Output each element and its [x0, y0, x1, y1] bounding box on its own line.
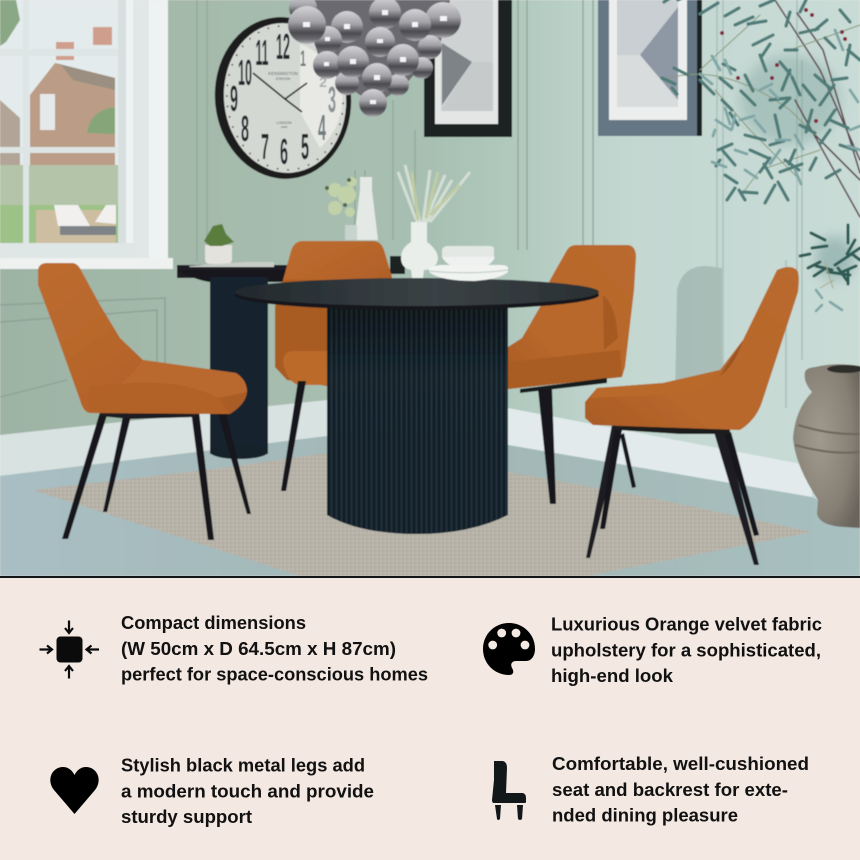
wall clock: 10: [238, 52, 252, 93]
wall clock: [207, 10, 359, 186]
chrome bubble chandelier: [288, 0, 461, 117]
pot plant on console: [189, 224, 274, 267]
icon: compact arrows: [40, 620, 99, 678]
baseboard: [0, 400, 812, 498]
rug: [33, 453, 812, 576]
wall clock: 8: [241, 108, 249, 149]
stone urn: [793, 364, 860, 528]
wall clock: KENSINGTON: [268, 71, 298, 76]
icon: chair: [492, 761, 526, 820]
text: comfortable seat: Comfortable, well-cushioned: [552, 754, 809, 774]
framed print right: [598, 0, 702, 136]
orange chair front left: [38, 263, 251, 540]
wall clock: 4: [318, 107, 326, 148]
wall clock: 1846: [281, 125, 288, 129]
floor: [0, 436, 860, 576]
text: compact dimensions: Compact dimensions: [121, 613, 306, 633]
text: comfortable seat: seat and backrest for exte-: [552, 780, 788, 800]
photo bottom divider: [0, 576, 860, 578]
text: black metal legs: Stylish black metal legs add: [121, 756, 365, 776]
feature: compact dimensions: [40, 613, 428, 684]
text: orange velvet: [551, 614, 822, 686]
icon: palette: [483, 623, 535, 675]
text: black metal legs: sturdy support: [121, 807, 252, 827]
tall white vase with flowers: [325, 177, 378, 240]
wall clock: 11: [256, 32, 268, 73]
wall clock: 9: [230, 78, 238, 119]
wall clock: 3: [328, 79, 336, 120]
text: compact dimensions: (W 50cm x D 64.5cm x H 87cm): [121, 639, 396, 659]
round table top: [235, 278, 599, 310]
features panel background: [0, 577, 860, 860]
text: black metal legs: a modern touch and provide: [121, 782, 374, 802]
text: compact dimensions: [121, 613, 428, 684]
text: orange velvet: Luxurious Orange velvet fabric: [551, 614, 822, 634]
wall clock: STATION: [276, 77, 291, 81]
olive tree branches: [662, 0, 860, 311]
window: [0, 0, 173, 269]
wall clock: 7: [261, 126, 269, 167]
orange chair front right: [585, 267, 799, 565]
text: orange velvet: upholstery for a sophisticated,: [551, 640, 821, 660]
icon: heart: [50, 767, 99, 814]
wall clock: 6: [280, 131, 288, 172]
orange chair back left: [275, 241, 392, 491]
text: black metal legs: [121, 756, 374, 827]
wall clock: 2: [319, 74, 327, 90]
text: orange velvet: high-end look: [551, 666, 674, 686]
console table behind: [177, 256, 405, 459]
photo: dining room scene: [0, 0, 860, 576]
stacked white bowls and plates: [429, 246, 508, 281]
wall clock: 5: [301, 126, 309, 167]
feature: black metal legs: [50, 756, 374, 827]
framed print left: [424, 0, 512, 137]
feature: comfortable seat: [492, 754, 809, 826]
text: comfortable seat: nded dining pleasure: [552, 806, 738, 826]
text: comfortable seat: [552, 754, 809, 826]
wall clock: 1: [300, 46, 306, 71]
wall: [0, 0, 860, 500]
feature: orange velvet: [483, 614, 822, 686]
wall clock: LONDON: [277, 121, 292, 125]
orange chair back right: [508, 245, 636, 504]
white bulb vase with stems: [398, 165, 470, 278]
text: compact dimensions: perfect for space-conscious homes: [121, 664, 428, 684]
fluted table base: [327, 305, 508, 534]
wall clock: 12: [276, 26, 290, 67]
